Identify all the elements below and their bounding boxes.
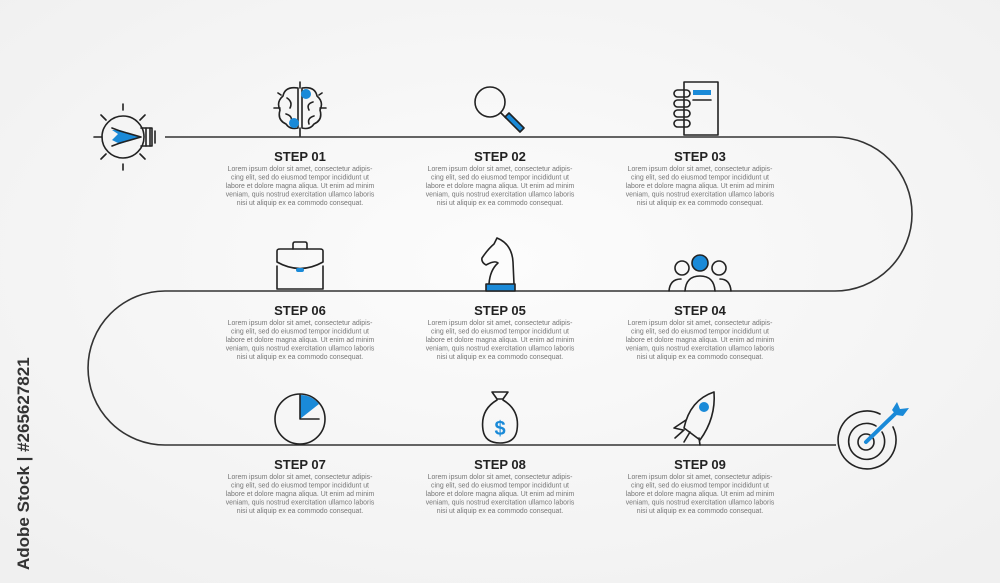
- side watermark text: Adobe Stock | #265627821: [14, 357, 33, 570]
- step texts: STEP 08: [474, 457, 526, 472]
- icon: light bulb start: [94, 104, 155, 170]
- body texts: Lorem ipsum dolor sit amet, consectetur adipis-: [228, 166, 372, 173]
- step texts: [274, 149, 727, 472]
- step texts: STEP 03: [674, 149, 726, 164]
- icon: clock: [275, 394, 325, 444]
- icon: rocket: [674, 392, 714, 445]
- icon: notebook: [674, 82, 718, 135]
- step texts: STEP 02: [474, 149, 526, 164]
- body texts: nisi ut aliquip ex ea commodo consequat.: [237, 200, 363, 207]
- icon: people: [669, 255, 731, 291]
- step texts: STEP 01: [274, 149, 326, 164]
- step texts: STEP 05: [474, 303, 526, 318]
- icon: brain: [274, 82, 326, 136]
- icon: briefcase: [277, 242, 323, 289]
- icon: money bag: [483, 392, 517, 443]
- icon: money bag: $: [494, 418, 506, 440]
- step texts: STEP 07: [274, 457, 326, 472]
- step texts: STEP 04: [674, 303, 727, 318]
- body texts: veniam, quis nostrud exercitation ullamco laboris: [226, 192, 375, 198]
- icon: target: [838, 402, 909, 469]
- icon: chess knight: [482, 238, 515, 291]
- body texts: cing elit, sed do eiusmod tempor incididunt ut: [231, 174, 369, 182]
- body texts: labore et dolore magna aliqua. Ut enim ad minim: [226, 183, 375, 190]
- icon: magnifier: [475, 87, 524, 132]
- body texts: [226, 166, 775, 515]
- timeline path: [88, 137, 912, 445]
- step texts: STEP 09: [674, 457, 726, 472]
- step texts: STEP 06: [274, 303, 326, 318]
